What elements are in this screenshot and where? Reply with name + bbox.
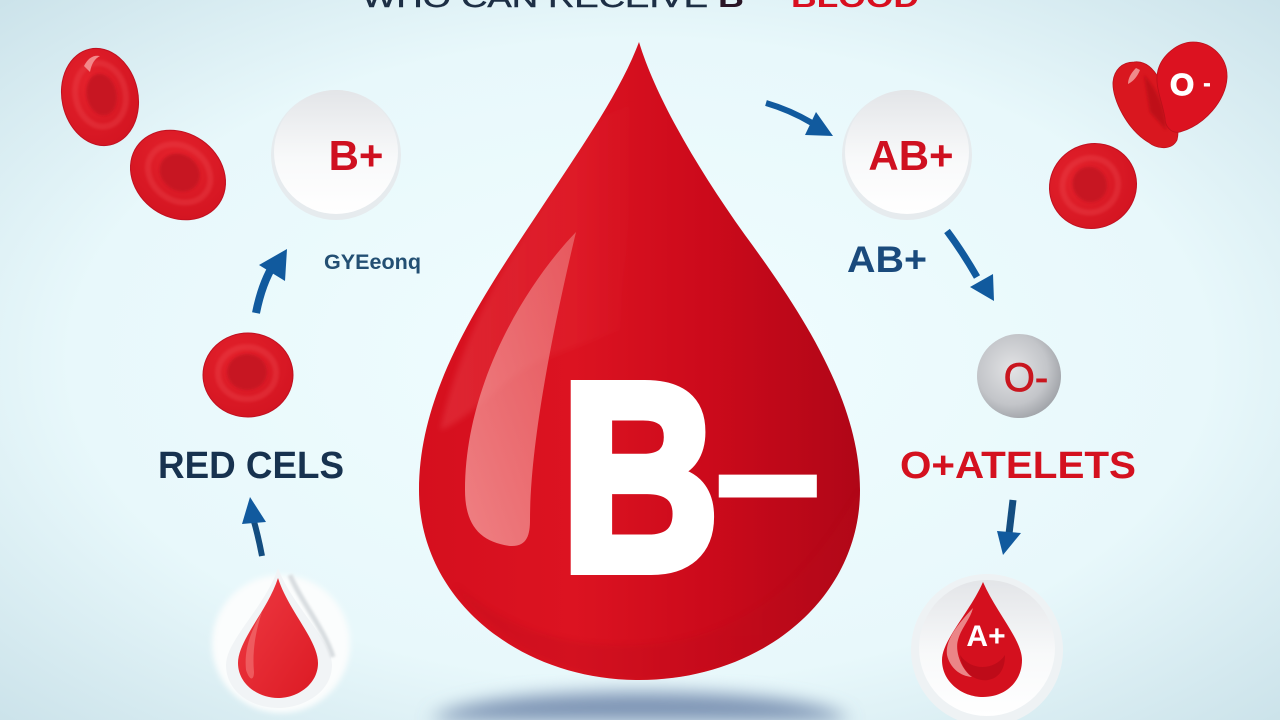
arrow to B+ xyxy=(256,249,287,313)
RED CELS label: RED CELS xyxy=(158,445,344,487)
heart-shaped O- cell: - xyxy=(1204,73,1210,95)
title xyxy=(362,0,919,13)
O- circle: O- xyxy=(1004,356,1048,400)
A+ drop xyxy=(942,582,1022,697)
arrow to A+ xyxy=(997,500,1021,555)
arrow to O- xyxy=(947,231,994,301)
central blood drop B- xyxy=(419,42,860,680)
arrow up to red cells xyxy=(242,497,266,556)
blood type label xyxy=(561,328,821,626)
blood type label: – xyxy=(715,366,821,578)
A+ drop: A+ xyxy=(966,620,1006,653)
red cell left xyxy=(203,333,293,417)
O- circle xyxy=(977,334,1061,418)
B+ circle xyxy=(271,90,401,220)
red cells top left xyxy=(53,41,243,238)
AB+ label: AB+ xyxy=(847,239,927,280)
drop shadow xyxy=(430,692,850,720)
highlight on drop xyxy=(465,232,576,546)
red cells top right xyxy=(1034,42,1227,244)
arrow to AB+ xyxy=(766,103,833,136)
B+ circle: B+ xyxy=(329,132,383,179)
heart-shaped O- cell: O xyxy=(1170,67,1194,102)
AB+ circle: AB+ xyxy=(868,132,954,179)
folded cell xyxy=(1113,62,1178,148)
bottom-left drop circle xyxy=(212,568,350,713)
heart-shaped O- cell xyxy=(1157,42,1227,132)
A+ circle xyxy=(911,574,1063,720)
blood type label: B xyxy=(561,328,719,626)
AB+ circle xyxy=(842,90,972,220)
O+ATELETS label: O+ATELETS xyxy=(900,445,1136,487)
garbled label: GYEeonq xyxy=(324,251,421,274)
